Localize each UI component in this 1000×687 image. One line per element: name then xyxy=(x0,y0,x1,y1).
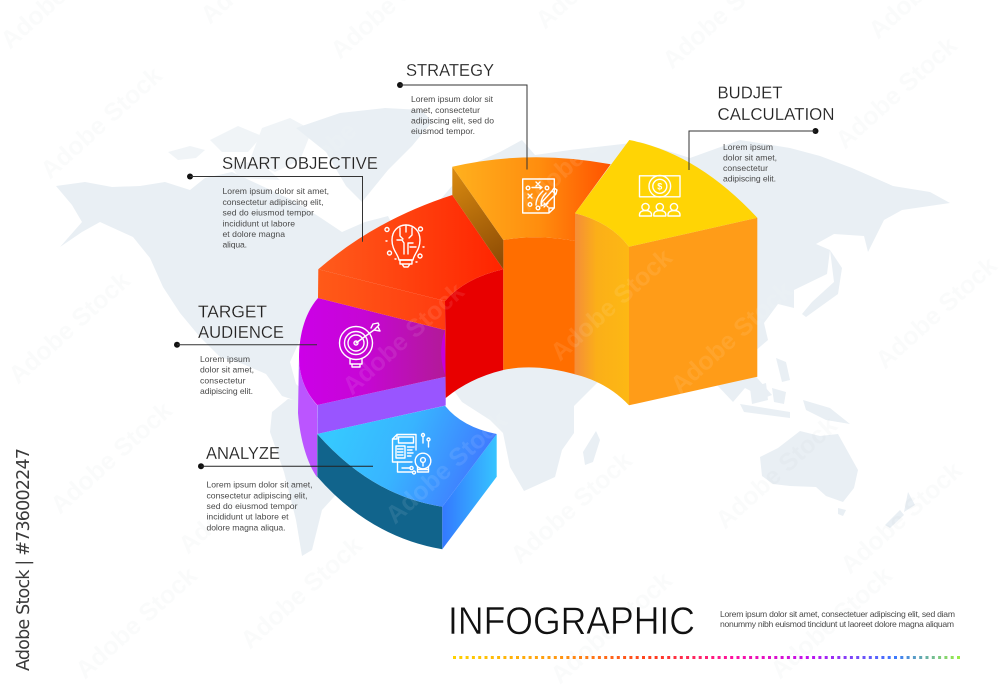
text block: strategy xyxy=(411,94,494,136)
icon: analysis report and idea xyxy=(392,434,431,474)
callout: target audience xyxy=(174,302,317,396)
segment: strategy side wall xyxy=(452,167,503,269)
heading: budget calculation: BUDJET xyxy=(718,82,783,102)
text block: analyze: Lorem ipsum dolor sit amet, xyxy=(206,480,312,490)
text block: smart objective xyxy=(222,186,329,250)
text block: analyze xyxy=(206,480,312,532)
callout: analyze xyxy=(198,443,373,532)
segment: purple top face xyxy=(299,298,446,405)
icon: money and team xyxy=(640,176,680,216)
text block: smart objective: sed do eiusmod tempor xyxy=(222,208,314,218)
background watermark marks: Adobe Stock xyxy=(765,561,898,684)
text block: strategy: amet, consectetur xyxy=(411,105,480,115)
map: eurasia xyxy=(440,140,950,402)
icon label: dollar sign: $ xyxy=(657,182,662,192)
text block: footer description: Lorem ipsum dolor sit amet, consectetuer adipiscing elit, sed diam xyxy=(720,609,955,619)
text block: budget calculation: Lorem ipsum xyxy=(723,142,773,152)
heading: target audience xyxy=(198,302,284,342)
map: new zealand xyxy=(885,492,915,528)
map: madagascar xyxy=(583,431,600,465)
segment: purple front face xyxy=(317,377,446,434)
heading: target audience: TARGET xyxy=(198,302,267,322)
text block: budget calculation xyxy=(723,142,777,184)
text block: strategy: Lorem ipsum dolor sit xyxy=(411,94,494,104)
background watermark marks: Adobe xyxy=(173,487,250,559)
segment: budget front wall xyxy=(629,218,757,405)
text block: target audience xyxy=(200,354,254,396)
text block: budget calculation: adipiscing elit. xyxy=(723,174,776,184)
leader line: analyze xyxy=(198,463,373,469)
overlay watermark on chart: Adobe Stock xyxy=(380,406,513,529)
text block: target audience: Lorem ipsum xyxy=(200,354,250,364)
leader line: target audience xyxy=(174,342,317,348)
text block: smart objective: incididunt ut labore xyxy=(222,218,295,228)
callout: smart objective xyxy=(187,153,378,250)
segment: purple inner glimpse xyxy=(441,330,446,377)
text block: footer description xyxy=(720,609,955,629)
segment: budget top face xyxy=(575,140,757,247)
callout: strategy xyxy=(397,60,527,170)
leader line: smart objective xyxy=(187,174,362,242)
background watermark marks: Adobe Stock xyxy=(870,251,1000,374)
text block: strategy: eiusmod tempor. xyxy=(411,126,475,136)
segment: analyze outer wall support (purple side) xyxy=(298,357,317,477)
map: africa xyxy=(452,362,600,491)
segment: strategy top face xyxy=(452,157,611,241)
text block: target audience: dolor sit amet, xyxy=(200,365,254,375)
callout: budget calculation xyxy=(689,82,834,184)
text block: strategy: adipiscing elit, sed do xyxy=(411,116,494,126)
segment: strategy inner wall xyxy=(503,237,575,374)
leader line: budget calculation xyxy=(689,128,818,170)
segment: red top face xyxy=(318,195,503,301)
background watermark marks: Adobe Stock xyxy=(835,456,968,579)
3D segmented ring chart xyxy=(298,140,757,549)
icon: circuit light bulb xyxy=(385,225,424,267)
heading: strategy: STRATEGY xyxy=(406,60,494,80)
background watermark marks: Adobe Stock xyxy=(545,566,678,687)
segment: analyze right wall xyxy=(442,434,497,549)
map: southeast asia islands xyxy=(740,358,850,424)
heading: smart objective: SMART OBJECTIVE xyxy=(222,153,378,173)
text block: smart objective: et dolore magna xyxy=(222,229,285,239)
map: south america xyxy=(270,399,345,556)
map: greenland xyxy=(296,108,432,202)
text block: target audience: adipiscing elit. xyxy=(200,386,253,396)
title: infographic: INFOGRAPHIC xyxy=(448,600,695,643)
map: japan xyxy=(802,250,842,317)
background watermark marks: Adobe Stock xyxy=(45,396,178,519)
text block: budget calculation: consectetur xyxy=(723,163,768,173)
background watermark marks: Adobe Stock xyxy=(70,561,203,684)
text block: analyze: incididunt ut labore et xyxy=(206,512,289,522)
segment: red side face xyxy=(318,269,445,330)
text block: smart objective: aliqua. xyxy=(222,240,247,250)
overlay watermark on chart: Adobe Stock xyxy=(337,277,470,400)
world map background xyxy=(56,108,950,556)
background watermark marks: Adobe Stock xyxy=(35,61,168,184)
segment: analyze outer wall xyxy=(317,434,442,549)
map: arctic islands xyxy=(168,118,312,180)
icon: strategy play sheet xyxy=(523,179,557,213)
overlay watermark on chart: Adobe xyxy=(285,117,362,189)
text block: analyze: consectetur adipiscing elit, xyxy=(206,490,308,500)
heading: budget calculation xyxy=(718,82,834,124)
map: australia xyxy=(760,431,858,516)
text block: target audience: consectetur xyxy=(200,375,246,385)
overlay watermark on chart: Adobe Stock xyxy=(545,243,678,366)
stock id vertical label: Adobe Stock | #736002247 xyxy=(14,448,34,671)
map: north america xyxy=(56,172,398,402)
background watermark marks: Adobe Stock xyxy=(710,411,843,534)
icon: target bulb with arrow xyxy=(340,323,380,367)
background watermark marks: Adobe Stock xyxy=(235,531,368,654)
overlay watermark on chart: Adobe Stock xyxy=(665,276,798,399)
text block: analyze: dolore magna aliqua. xyxy=(206,522,286,532)
text block: budget calculation: dolor sit amet, xyxy=(723,153,777,163)
heading: budget calculation: CALCULATION xyxy=(718,104,834,124)
text block: analyze: sed do eiusmod tempor xyxy=(206,501,298,511)
leader line: strategy xyxy=(397,82,527,170)
background watermark marks: Adobe Stock xyxy=(830,31,963,154)
segment: analyze top face xyxy=(317,406,497,507)
text block: smart objective: Lorem ipsum dolor sit amet, xyxy=(222,186,329,196)
background watermark marks: Adobe Stock xyxy=(505,446,638,569)
overlay watermark on chart xyxy=(285,93,798,529)
heading: target audience: AUDIENCE xyxy=(198,322,284,342)
text block: footer description: nonummy nibh euismod tincidunt ut laoreet dolore magna aliquam xyxy=(720,619,954,629)
segment: budget curved inner wall xyxy=(574,213,629,405)
dotted rainbow divider xyxy=(453,656,961,659)
background watermark marks: Adobe Stock xyxy=(3,266,136,389)
segment: red inner wall xyxy=(445,269,503,398)
text block: smart objective: consectetur adipiscing elit, xyxy=(222,197,324,207)
heading: analyze: ANALYZE xyxy=(206,443,280,463)
overlay watermark on chart: Adobe Stock xyxy=(513,93,646,216)
